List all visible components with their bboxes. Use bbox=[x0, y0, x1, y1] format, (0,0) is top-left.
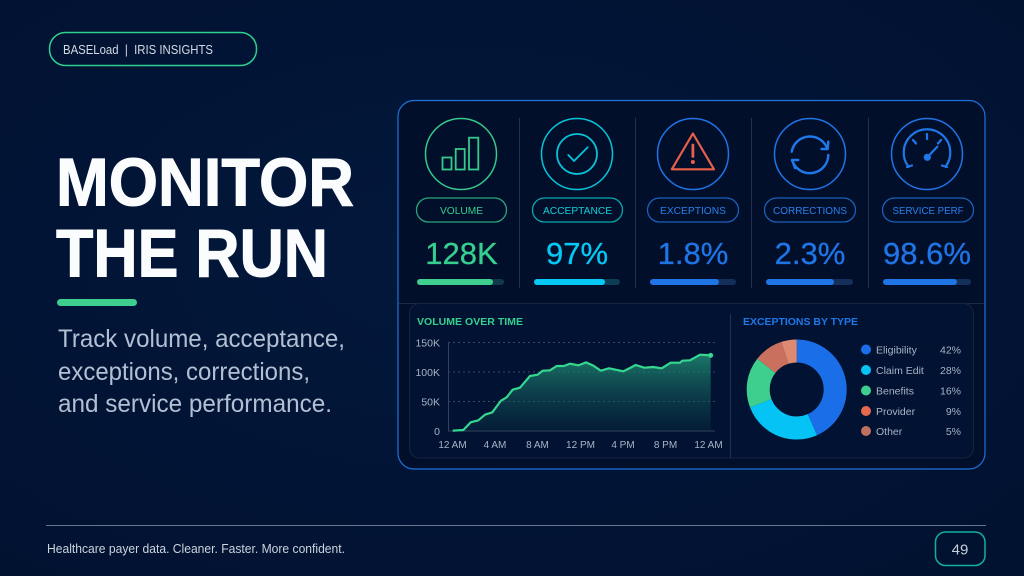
page number bbox=[936, 532, 985, 566]
icon: gauge bbox=[904, 129, 950, 167]
y axis labels: 100K bbox=[415, 367, 440, 379]
y axis labels: 0 bbox=[434, 426, 440, 438]
area line series bbox=[453, 353, 713, 431]
legend: Eligibility bbox=[876, 344, 918, 356]
icon: check mark bbox=[557, 134, 597, 174]
legend: 42% bbox=[940, 344, 961, 356]
KPI: corrections: 2.3% bbox=[775, 236, 845, 271]
x axis labels: 4 PM bbox=[611, 440, 635, 451]
legend: Benefits bbox=[876, 386, 914, 398]
title bbox=[56, 144, 354, 292]
KPI: acceptance: 97% bbox=[546, 236, 608, 271]
chart: exceptions by type bbox=[743, 316, 961, 438]
KPI: volume: 128K bbox=[425, 236, 498, 271]
x axis labels: 12 PM bbox=[566, 440, 595, 451]
page number: 49 bbox=[952, 542, 968, 558]
title: THE RUN bbox=[56, 216, 328, 292]
KPI: acceptance: ACCEPTANCE bbox=[543, 205, 612, 217]
x axis labels: 8 AM bbox=[526, 440, 549, 451]
chart: volume over time bbox=[415, 316, 723, 451]
x axis labels: 4 AM bbox=[484, 440, 506, 451]
panel: dashboard bbox=[398, 100, 985, 469]
accent bar bbox=[57, 299, 137, 306]
legend: Provider bbox=[876, 406, 916, 418]
icon: refresh arrows bbox=[792, 136, 828, 173]
legend: Other bbox=[876, 426, 903, 438]
description: Track volume, acceptance, bbox=[58, 325, 345, 353]
y axis labels: 150K bbox=[415, 338, 440, 350]
KPI: volume bbox=[416, 118, 506, 285]
description bbox=[58, 325, 345, 418]
brand tag: BASELoad | IRIS INSIGHTS bbox=[63, 42, 213, 57]
y axis labels: 50K bbox=[421, 396, 440, 408]
icon: warning triangle bbox=[672, 134, 714, 169]
KPI: service performance bbox=[882, 118, 974, 285]
brand tag bbox=[50, 32, 256, 66]
KPI: corrections: CORRECTIONS bbox=[773, 205, 847, 217]
icon: bar chart bbox=[442, 138, 478, 170]
description: exceptions, corrections, bbox=[58, 358, 310, 386]
description: and service performance. bbox=[58, 390, 332, 418]
y axis labels bbox=[415, 338, 440, 438]
footer tagline: Healthcare payer data. Cleaner. Faster. More confident. bbox=[47, 542, 345, 556]
x axis labels: 8 PM bbox=[654, 440, 677, 451]
x axis labels: 12 AM bbox=[694, 440, 723, 451]
panel: charts bbox=[410, 304, 974, 458]
legend: 16% bbox=[940, 386, 961, 398]
legend bbox=[861, 344, 961, 438]
KPI: exceptions: 1.8% bbox=[658, 236, 728, 271]
KPI: service performance: SERVICE PERF bbox=[892, 205, 964, 217]
donut chart bbox=[758, 351, 835, 428]
legend: 5% bbox=[946, 426, 961, 438]
legend: 9% bbox=[946, 406, 961, 418]
x axis labels: 12 AM bbox=[438, 440, 467, 451]
KPI: volume: VOLUME bbox=[440, 205, 483, 217]
KPI: exceptions: EXCEPTIONS bbox=[660, 205, 726, 217]
KPI: exceptions bbox=[648, 118, 738, 285]
legend: 28% bbox=[940, 365, 961, 377]
chart title: VOLUME OVER TIME bbox=[417, 316, 523, 328]
KPI: acceptance bbox=[532, 118, 622, 285]
x axis labels bbox=[438, 440, 723, 451]
chart title: EXCEPTIONS BY TYPE bbox=[743, 316, 858, 328]
footer rule bbox=[46, 524, 986, 526]
KPI: corrections bbox=[764, 118, 856, 285]
title: MONITOR bbox=[56, 144, 354, 220]
legend: Claim Edit bbox=[876, 365, 924, 377]
KPI: service performance: 98.6% bbox=[883, 236, 971, 271]
